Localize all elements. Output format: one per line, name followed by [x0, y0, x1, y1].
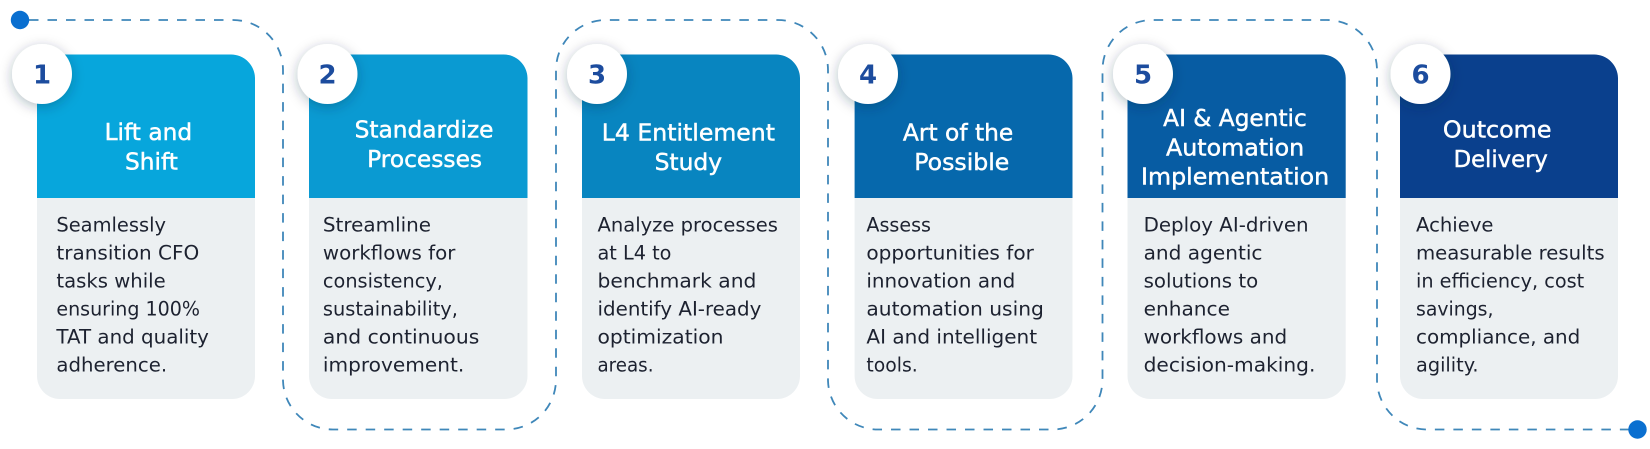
- heading: step 3: Study: [655, 150, 722, 176]
- panel: step 4 Art of the Possible: [838, 44, 1072, 399]
- text: step 5 description: decision-making.: [1144, 354, 1315, 377]
- heading: step 1: Shift: [125, 149, 178, 175]
- text: step 2 description: improvement.: [323, 354, 464, 377]
- panel: step 3 L4 Entitlement Study: [567, 44, 800, 399]
- text: step 4 description: innovation and: [866, 270, 1015, 293]
- text: step 2 description: sustainability,: [323, 298, 458, 321]
- text: step 4 description: [866, 214, 1044, 377]
- panel: step 2 Standardize Processes: 2: [318, 60, 337, 90]
- text: step 5 description: and agentic: [1144, 242, 1262, 265]
- text: step 2 description: Streamline: [323, 214, 431, 237]
- text: step 1 description: ensuring 100%: [56, 298, 200, 321]
- heading: step 5: Implementation: [1141, 165, 1329, 191]
- heading: step 5: Automation: [1166, 135, 1304, 161]
- text: step 3 description: at L4 to: [598, 242, 671, 265]
- text: step 1 description: TAT and quality: [55, 326, 209, 349]
- text: step 6 description: compliance, and: [1416, 326, 1580, 349]
- panel: step 5 AI and Agentic Automation Implementation: [1113, 44, 1346, 399]
- heading: step 2: Processes: [367, 147, 482, 173]
- text: step 6 description: savings,: [1416, 298, 1494, 321]
- heading: step 2: [355, 118, 494, 173]
- heading: step 1: [105, 120, 192, 175]
- text: step 4 description: automation using: [866, 298, 1044, 321]
- panel: step 6 Outcome Delivery: 6: [1411, 60, 1430, 90]
- text: step 2 description: and continuous: [323, 326, 479, 349]
- text: step 1 description: adherence.: [56, 354, 167, 377]
- text: step 3 description: areas.: [598, 354, 654, 377]
- text: step 4 description: AI and intelligent: [866, 326, 1038, 349]
- heading: step 4: [903, 121, 1013, 176]
- text: step 1 description: tasks while: [56, 270, 166, 293]
- start dot: [11, 11, 29, 29]
- heading: step 6: [1443, 118, 1552, 173]
- text: step 2 description: [323, 214, 479, 377]
- heading: step 5: AI & Agentic: [1163, 106, 1307, 132]
- text: step 4 description: tools.: [866, 354, 918, 377]
- text: step 5 description: solutions to: [1144, 270, 1258, 293]
- text: step 5 description: [1144, 214, 1315, 377]
- heading: step 4: Art of the: [903, 121, 1013, 147]
- panel: step 5 AI and Agentic Automation Implementation: 5: [1134, 60, 1152, 90]
- heading: step 4: Possible: [914, 150, 1009, 176]
- heading: step 2: Standardize: [355, 118, 494, 144]
- text: step 1 description: [55, 214, 209, 377]
- panel: step 3 L4 Entitlement Study: 3: [588, 60, 606, 90]
- text: step 6 description: [1416, 214, 1605, 377]
- panel: step 6 Outcome Delivery: [1390, 44, 1618, 399]
- text: step 1 description: Seamlessly: [56, 214, 166, 237]
- text: step 6 description: agility.: [1416, 354, 1478, 377]
- heading: step 1: Lift and: [105, 120, 192, 146]
- text: step 6 description: in efficiency, cost: [1416, 270, 1585, 293]
- text: step 3 description: optimization: [598, 326, 724, 349]
- panel: step 1 Lift and Shift: [12, 44, 255, 399]
- text: step 3 description: identify AI-ready: [598, 298, 761, 321]
- text: step 3 description: benchmark and: [598, 270, 756, 293]
- text: step 4 description: Assess: [866, 214, 931, 237]
- text: step 5 description: workflows and: [1144, 326, 1287, 349]
- text: step 4 description: opportunities for: [866, 242, 1034, 265]
- heading: step 3: [602, 121, 775, 176]
- text: step 1 description: transition CFO: [56, 242, 199, 265]
- heading: step 6: Delivery: [1454, 147, 1548, 173]
- text: step 5 description: enhance: [1144, 298, 1230, 321]
- heading: step 6: Outcome: [1443, 118, 1552, 144]
- end dot: [1628, 420, 1647, 439]
- panel: step 4 Art of the Possible: 4: [859, 60, 877, 90]
- text: step 2 description: consistency,: [323, 270, 443, 293]
- heading: step 3: L4 Entitlement: [602, 121, 775, 147]
- heading: step 5: [1141, 106, 1329, 191]
- text: step 2 description: workflows for: [323, 242, 456, 265]
- panel: step 2 Standardize Processes: [298, 44, 528, 399]
- text: step 6 description: measurable results: [1416, 242, 1605, 265]
- text: step 3 description: Analyze processes: [598, 214, 778, 237]
- text: step 5 description: Deploy AI-driven: [1144, 214, 1309, 237]
- panel: step 1 Lift and Shift: 1: [33, 60, 51, 90]
- text: step 3 description: [598, 214, 778, 377]
- text: step 6 description: Achieve: [1416, 214, 1494, 237]
